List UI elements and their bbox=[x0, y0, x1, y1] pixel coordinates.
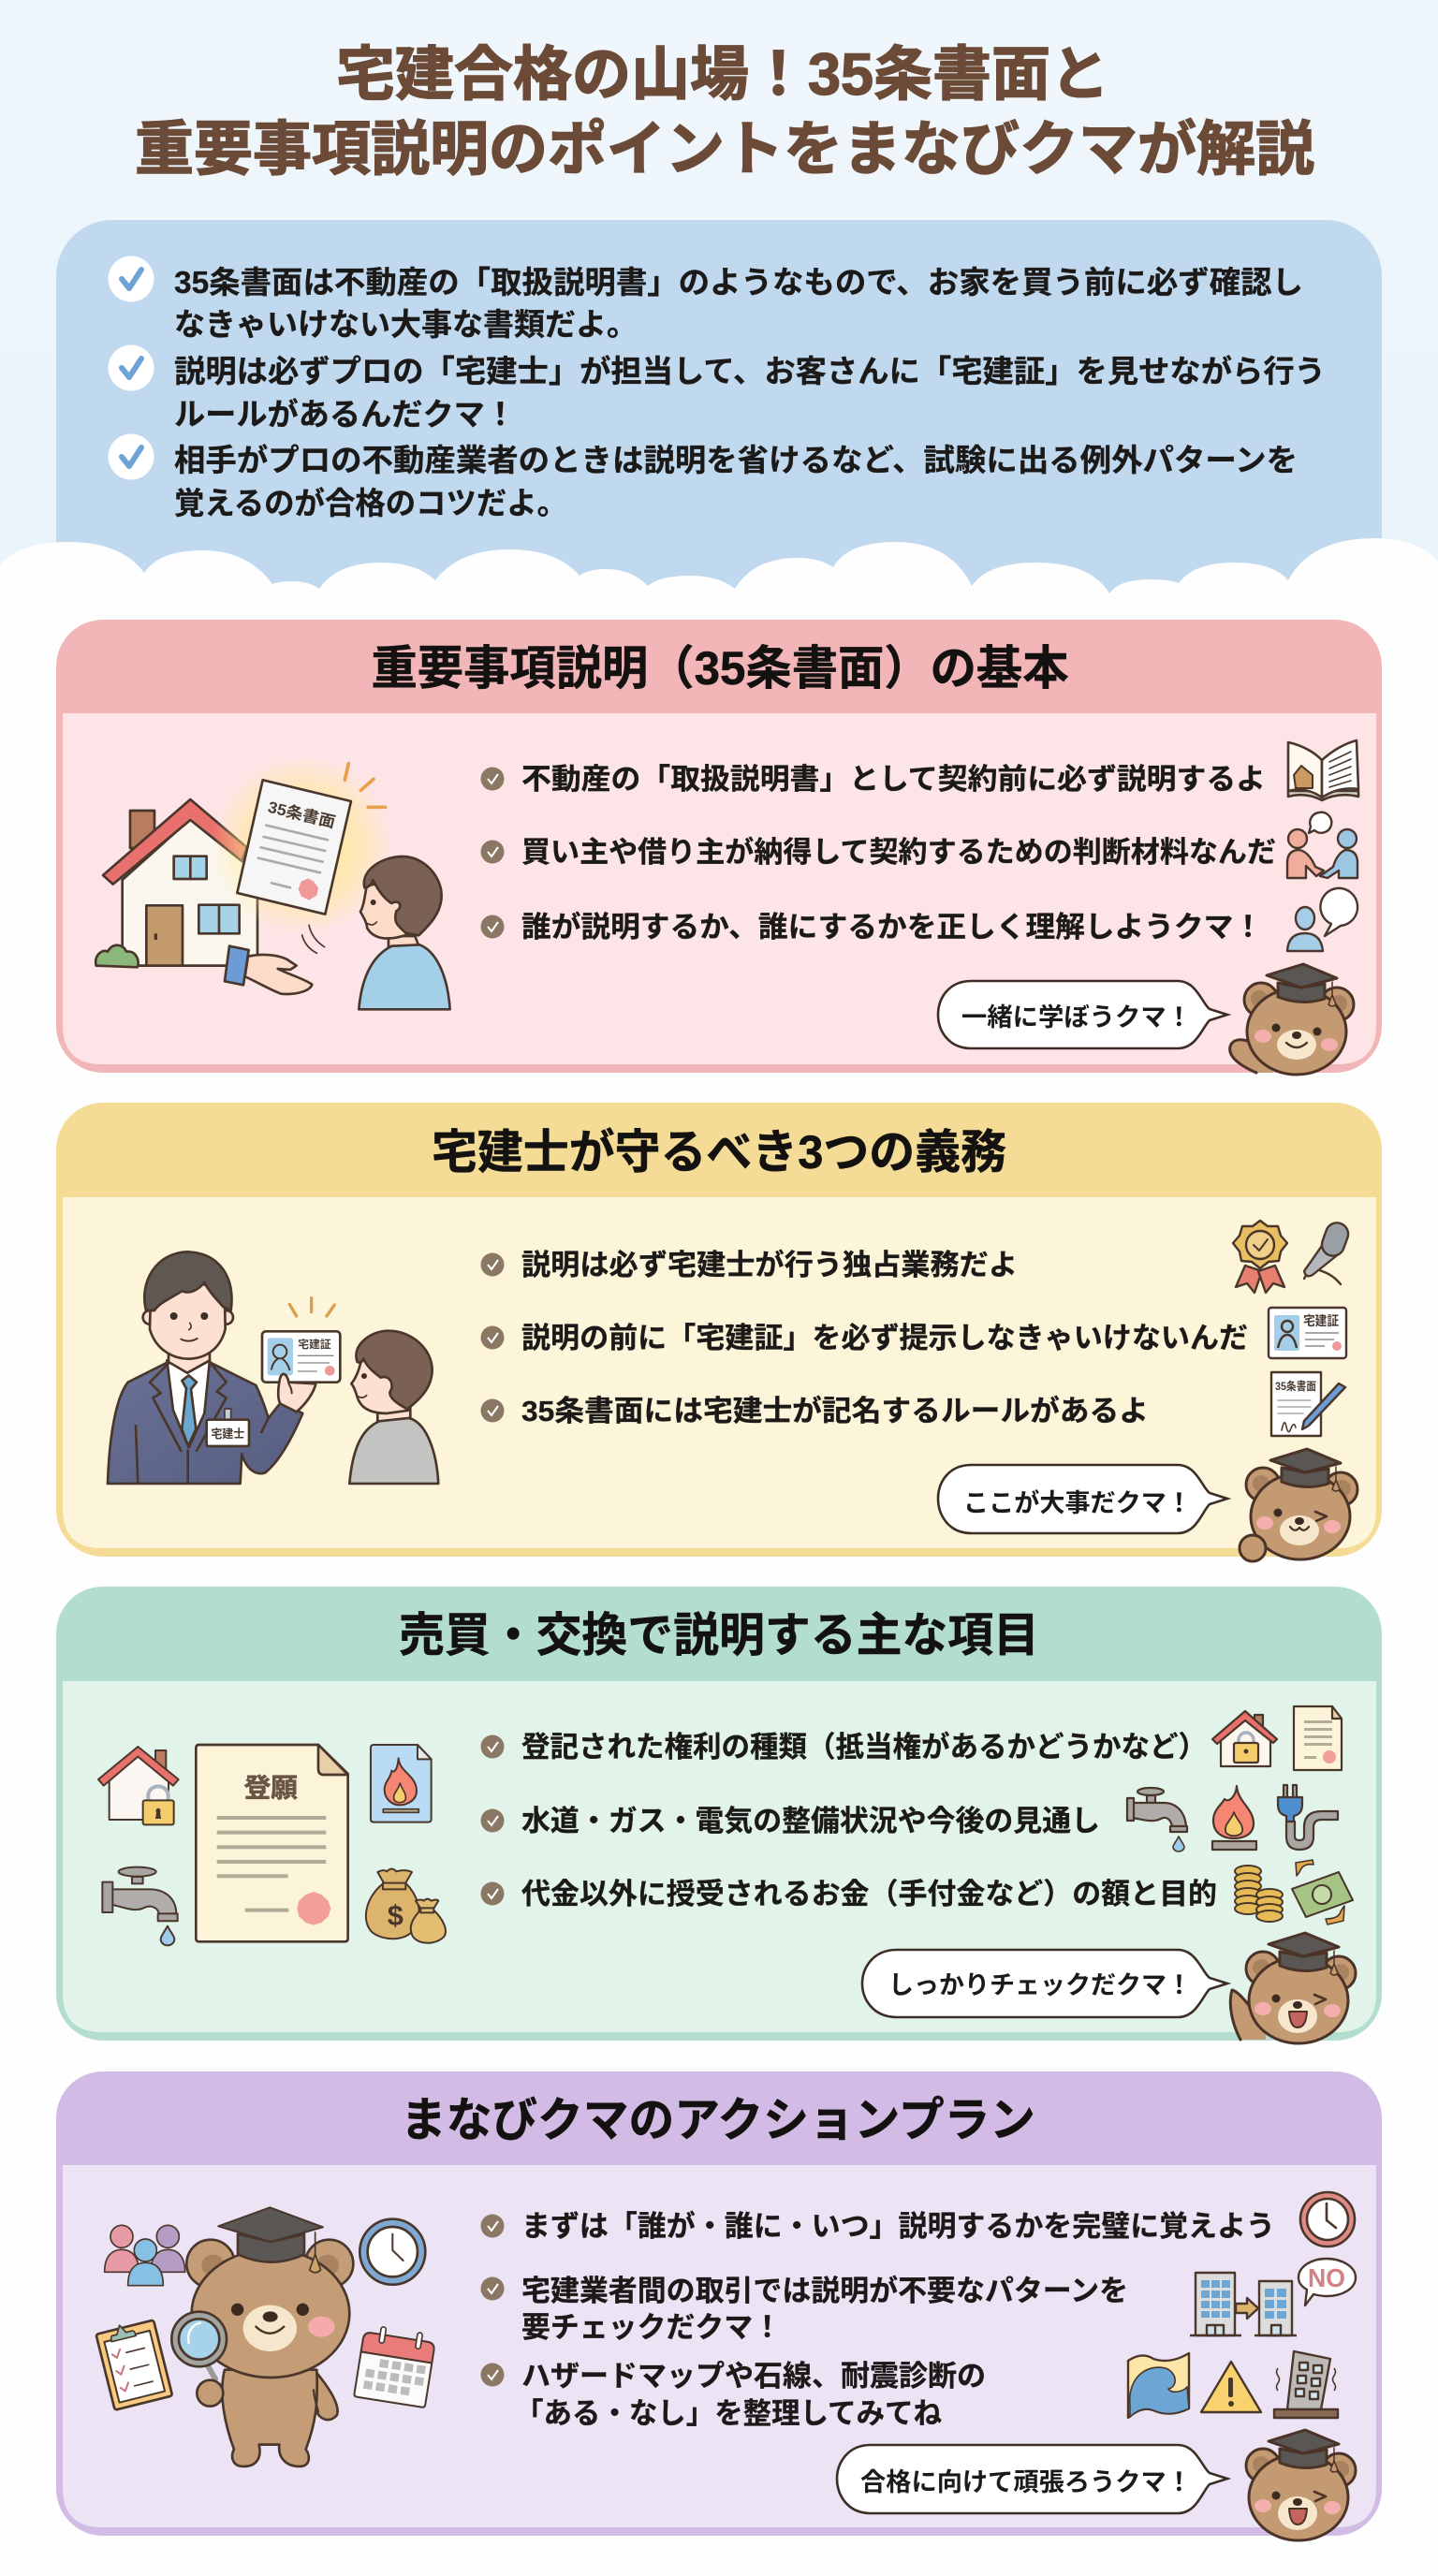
bullet 3: ハザードマップや石線、耐震診断の bbox=[521, 2360, 986, 2393]
icon: microphone bbox=[1304, 1220, 1351, 1284]
bear mascot bbox=[1230, 964, 1354, 1075]
bear mascot, pointing bbox=[1230, 1933, 1356, 2043]
bullet 3 bbox=[481, 2360, 986, 2430]
icon: coins bbox=[1235, 1866, 1283, 1922]
summary text 3 bbox=[174, 443, 1298, 520]
panel: basics of explanation bbox=[56, 620, 1382, 1075]
icon: banknote and arrows bbox=[1292, 1860, 1353, 1925]
bullet 2: 買い主や借り主が納得して契約するための判断材料なんだ bbox=[521, 836, 1276, 869]
panel: items to explain bbox=[56, 1587, 1382, 2043]
summary text 2: ルールがあるんだクマ！ bbox=[174, 397, 516, 432]
icon: medal bbox=[1233, 1221, 1287, 1293]
bullet 1: 説明は必ず宅建士が行う独占業務だよ bbox=[521, 1249, 1018, 1281]
icon: hazard map bbox=[1128, 2353, 1189, 2418]
bullet 1: 不動産の「取扱説明書」として契約前に必ず説明するよ bbox=[521, 763, 1266, 796]
callout: 一緒に学ぼうクマ！ bbox=[961, 1003, 1192, 1032]
bear mascot, head only bbox=[1246, 2430, 1356, 2540]
callout: しっかりチェックだクマ！ bbox=[888, 1971, 1192, 1999]
callout: ここが大事だクマ！ bbox=[963, 1488, 1192, 1517]
panel: action plan bbox=[56, 2071, 1382, 2540]
illustration: licensed agent showing card: 宅建証 bbox=[298, 1338, 331, 1351]
heading: 売買・交換で説明する主な項目 bbox=[399, 1609, 1039, 1661]
title bbox=[135, 42, 1314, 183]
summary text 2 bbox=[174, 354, 1326, 432]
bear mascot, winking bbox=[1240, 1449, 1357, 1561]
icon: NO speech bubble: NO bbox=[1308, 2263, 1345, 2292]
icon: warning triangle bbox=[1201, 2362, 1261, 2412]
callout bbox=[938, 1465, 1227, 1533]
callout bbox=[862, 1950, 1227, 2017]
illustration: house, document and person bbox=[95, 755, 450, 1009]
title: 宅建合格の山場！35条書面と bbox=[336, 42, 1109, 108]
illustration: document with icons: 登願 bbox=[244, 1773, 298, 1802]
bullet 2: 水道・ガス・電気の整備状況や今後の見通し bbox=[521, 1805, 1100, 1837]
bullet 2: 要チェックだクマ！ bbox=[521, 2311, 782, 2344]
title: 重要事項説明のポイントをまなびクマが解説 bbox=[135, 117, 1314, 183]
bullet list bbox=[481, 2210, 1275, 2430]
summary text 1: 35条書面は不動産の「取扱説明書」のようなもので、お家を買う前に必ず確認し bbox=[174, 265, 1303, 300]
icon: document and pen bbox=[1271, 1372, 1345, 1436]
icon: NO speech bubble bbox=[1299, 2259, 1356, 2305]
heading: 宅建士が守るべき3つの義務 bbox=[432, 1126, 1006, 1178]
summary text 3: 相手がプロの不動産業者のときは説明を省けるなど、試験に出る例外パターンを bbox=[174, 443, 1298, 477]
heading: 重要事項説明（35条書面）の基本 bbox=[371, 642, 1069, 695]
bullet 2 bbox=[481, 2275, 1128, 2344]
illustration: house, document and person: 35条書面 bbox=[266, 798, 337, 831]
icon: registration document bbox=[1294, 1706, 1342, 1770]
illustration: bear with magnifier and planning icons bbox=[95, 2207, 436, 2466]
bullet 2: 宅建業者間の取引では説明が不要なパターンを bbox=[521, 2275, 1128, 2307]
icon: house with lock bbox=[1212, 1711, 1277, 1766]
icon: faucet bbox=[1127, 1788, 1187, 1852]
panel: summary bbox=[56, 220, 1382, 618]
bullet 3: 代金以外に授受されるお金（手付金など）の額と目的 bbox=[521, 1878, 1217, 1910]
icon: gas flame bbox=[1212, 1786, 1256, 1850]
illustration: licensed agent showing card bbox=[108, 1251, 438, 1484]
heading: まなびクマのアクションプラン bbox=[401, 2094, 1035, 2146]
icon: clock bbox=[1300, 2192, 1355, 2247]
icon: license card: 宅建証 bbox=[1303, 1313, 1339, 1328]
bullet list bbox=[481, 763, 1276, 944]
icon: tilted building bbox=[1274, 2351, 1338, 2418]
bullet 1: まずは「誰が・誰に・いつ」説明するかを完璧に覚えよう bbox=[521, 2210, 1275, 2243]
illustration: licensed agent showing card: 宅建士 bbox=[211, 1427, 245, 1441]
icon: plug and pipe bbox=[1278, 1785, 1338, 1850]
check icon 2 bbox=[109, 344, 154, 391]
icon: document and pen: 35条書面 bbox=[1275, 1379, 1316, 1393]
icon: people shaking hands bbox=[1287, 812, 1357, 878]
check icon 3 bbox=[109, 434, 154, 479]
summary text 3: 覚えるのが合格のコツだよ。 bbox=[174, 486, 567, 520]
summary text 2: 説明は必ずプロの「宅建士」が担当して、お客さんに「宅建証」を見せながら行う bbox=[174, 354, 1326, 388]
bullet 3: 誰が説明するか、誰にするかを正しく理解しようクマ！ bbox=[521, 911, 1263, 944]
illustration: document with icons: $ bbox=[388, 1900, 404, 1932]
bullet list bbox=[481, 1249, 1248, 1427]
clouds bbox=[0, 538, 1438, 620]
icon: buildings with arrow bbox=[1190, 2273, 1297, 2335]
bullet list bbox=[481, 1731, 1217, 1910]
bullet 1: 登記された権利の種類（抵当権があるかどうかなど） bbox=[521, 1731, 1207, 1764]
panel: three duties bbox=[56, 1103, 1382, 1561]
bullet 3: 「ある・なし」を整理してみてね bbox=[515, 2397, 942, 2430]
summary text 1 bbox=[174, 265, 1303, 342]
icon: person with speech bubble bbox=[1287, 888, 1357, 951]
summary text 1: なきゃいけない大事な書類だよ。 bbox=[174, 307, 638, 342]
icon: license card bbox=[1269, 1308, 1346, 1358]
bullet 3: 35条書面には宅建士が記名するルールがあるよ bbox=[521, 1395, 1149, 1427]
illustration: document with icons bbox=[98, 1745, 446, 1945]
callout bbox=[837, 2445, 1227, 2513]
bullet 2: 説明の前に「宅建証」を必ず提示しなきゃいけないんだ bbox=[521, 1322, 1248, 1354]
callout: 合格に向けて頑張ろうクマ！ bbox=[860, 2468, 1192, 2496]
icon: open book with house bbox=[1288, 740, 1358, 800]
callout bbox=[938, 981, 1227, 1048]
check icon 1 bbox=[109, 256, 154, 301]
